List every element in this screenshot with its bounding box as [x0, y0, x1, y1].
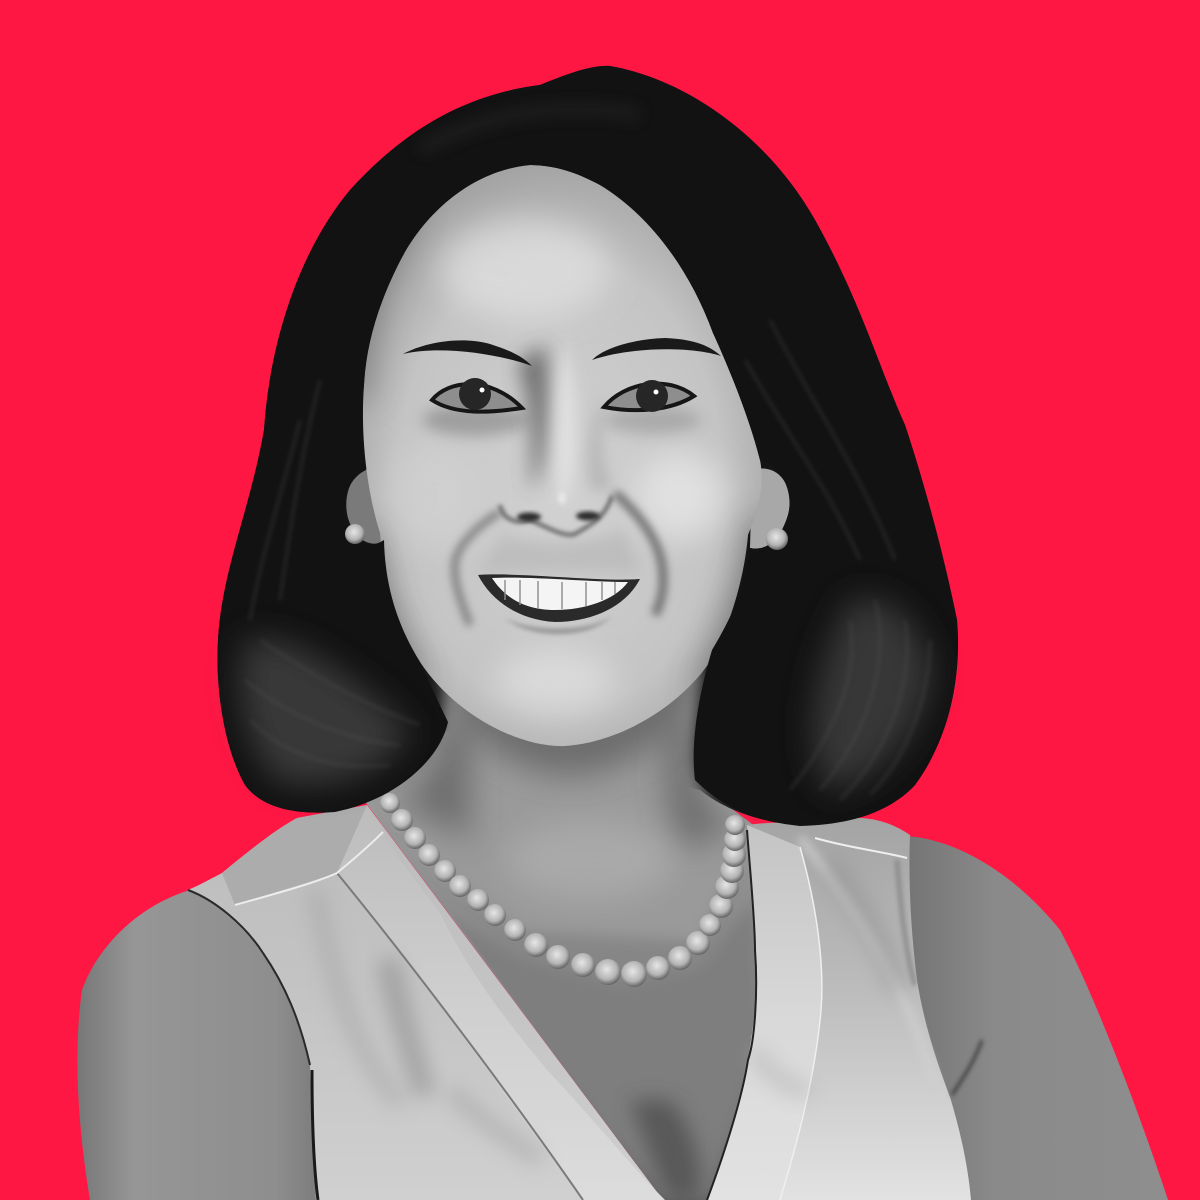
- left eye socket shadow: [423, 404, 527, 436]
- blouse right folds: [707, 830, 935, 1200]
- right eye socket shadow: [604, 406, 700, 434]
- right earring: [766, 528, 788, 550]
- brow to nose shadow: [518, 345, 548, 490]
- lower face left edge shadow: [376, 520, 436, 680]
- blouse right panel: [707, 818, 971, 1200]
- right eye: [604, 380, 694, 412]
- lower face right edge shadow: [683, 506, 757, 690]
- mouth: [478, 574, 640, 634]
- left hair strands: [245, 380, 420, 766]
- face: [362, 165, 762, 746]
- forehead left shadow: [363, 227, 422, 408]
- left eye: [432, 378, 522, 412]
- pearl necklace: [380, 793, 746, 987]
- upper chest highlight: [505, 820, 675, 900]
- right hair strands: [745, 320, 930, 800]
- left arm: [77, 880, 360, 1200]
- hair sides and strands: [217, 66, 958, 826]
- forehead highlight: [440, 220, 610, 320]
- nose highlight: [554, 340, 576, 505]
- nose: [500, 492, 612, 535]
- right cheek highlight: [635, 450, 725, 540]
- right arm crease: [952, 1040, 982, 1095]
- cleavage shadow: [630, 1100, 701, 1200]
- nose wing shadow: [585, 412, 612, 492]
- left neck shadow: [395, 720, 470, 840]
- hair back layer: [217, 66, 958, 826]
- left smile line: [455, 512, 500, 625]
- blouse left body: [188, 805, 663, 1200]
- right neck shadow: [665, 720, 735, 850]
- left cheek highlight: [410, 472, 432, 522]
- chin shadow: [440, 650, 705, 775]
- blouse left lapel: [320, 805, 665, 1200]
- upper lip area: [488, 534, 634, 571]
- chest skin below necklace: [470, 916, 752, 1200]
- right hair sheen: [813, 598, 932, 790]
- blouse right lapel: [707, 825, 822, 1200]
- left earring: [345, 524, 365, 544]
- crown sheen: [420, 109, 640, 150]
- chin highlight: [495, 648, 615, 712]
- left ear: [346, 468, 384, 544]
- right smile line: [615, 493, 663, 615]
- left hair sheen: [240, 638, 410, 785]
- right eyebrow: [592, 338, 721, 360]
- neck: [388, 650, 748, 940]
- neck and chest skin: [360, 680, 760, 1200]
- blouse left folds: [188, 832, 583, 1200]
- right arm: [880, 836, 1168, 1200]
- right ear: [750, 469, 790, 549]
- left eyebrow: [403, 340, 532, 366]
- blouse left shoulder: [222, 805, 367, 905]
